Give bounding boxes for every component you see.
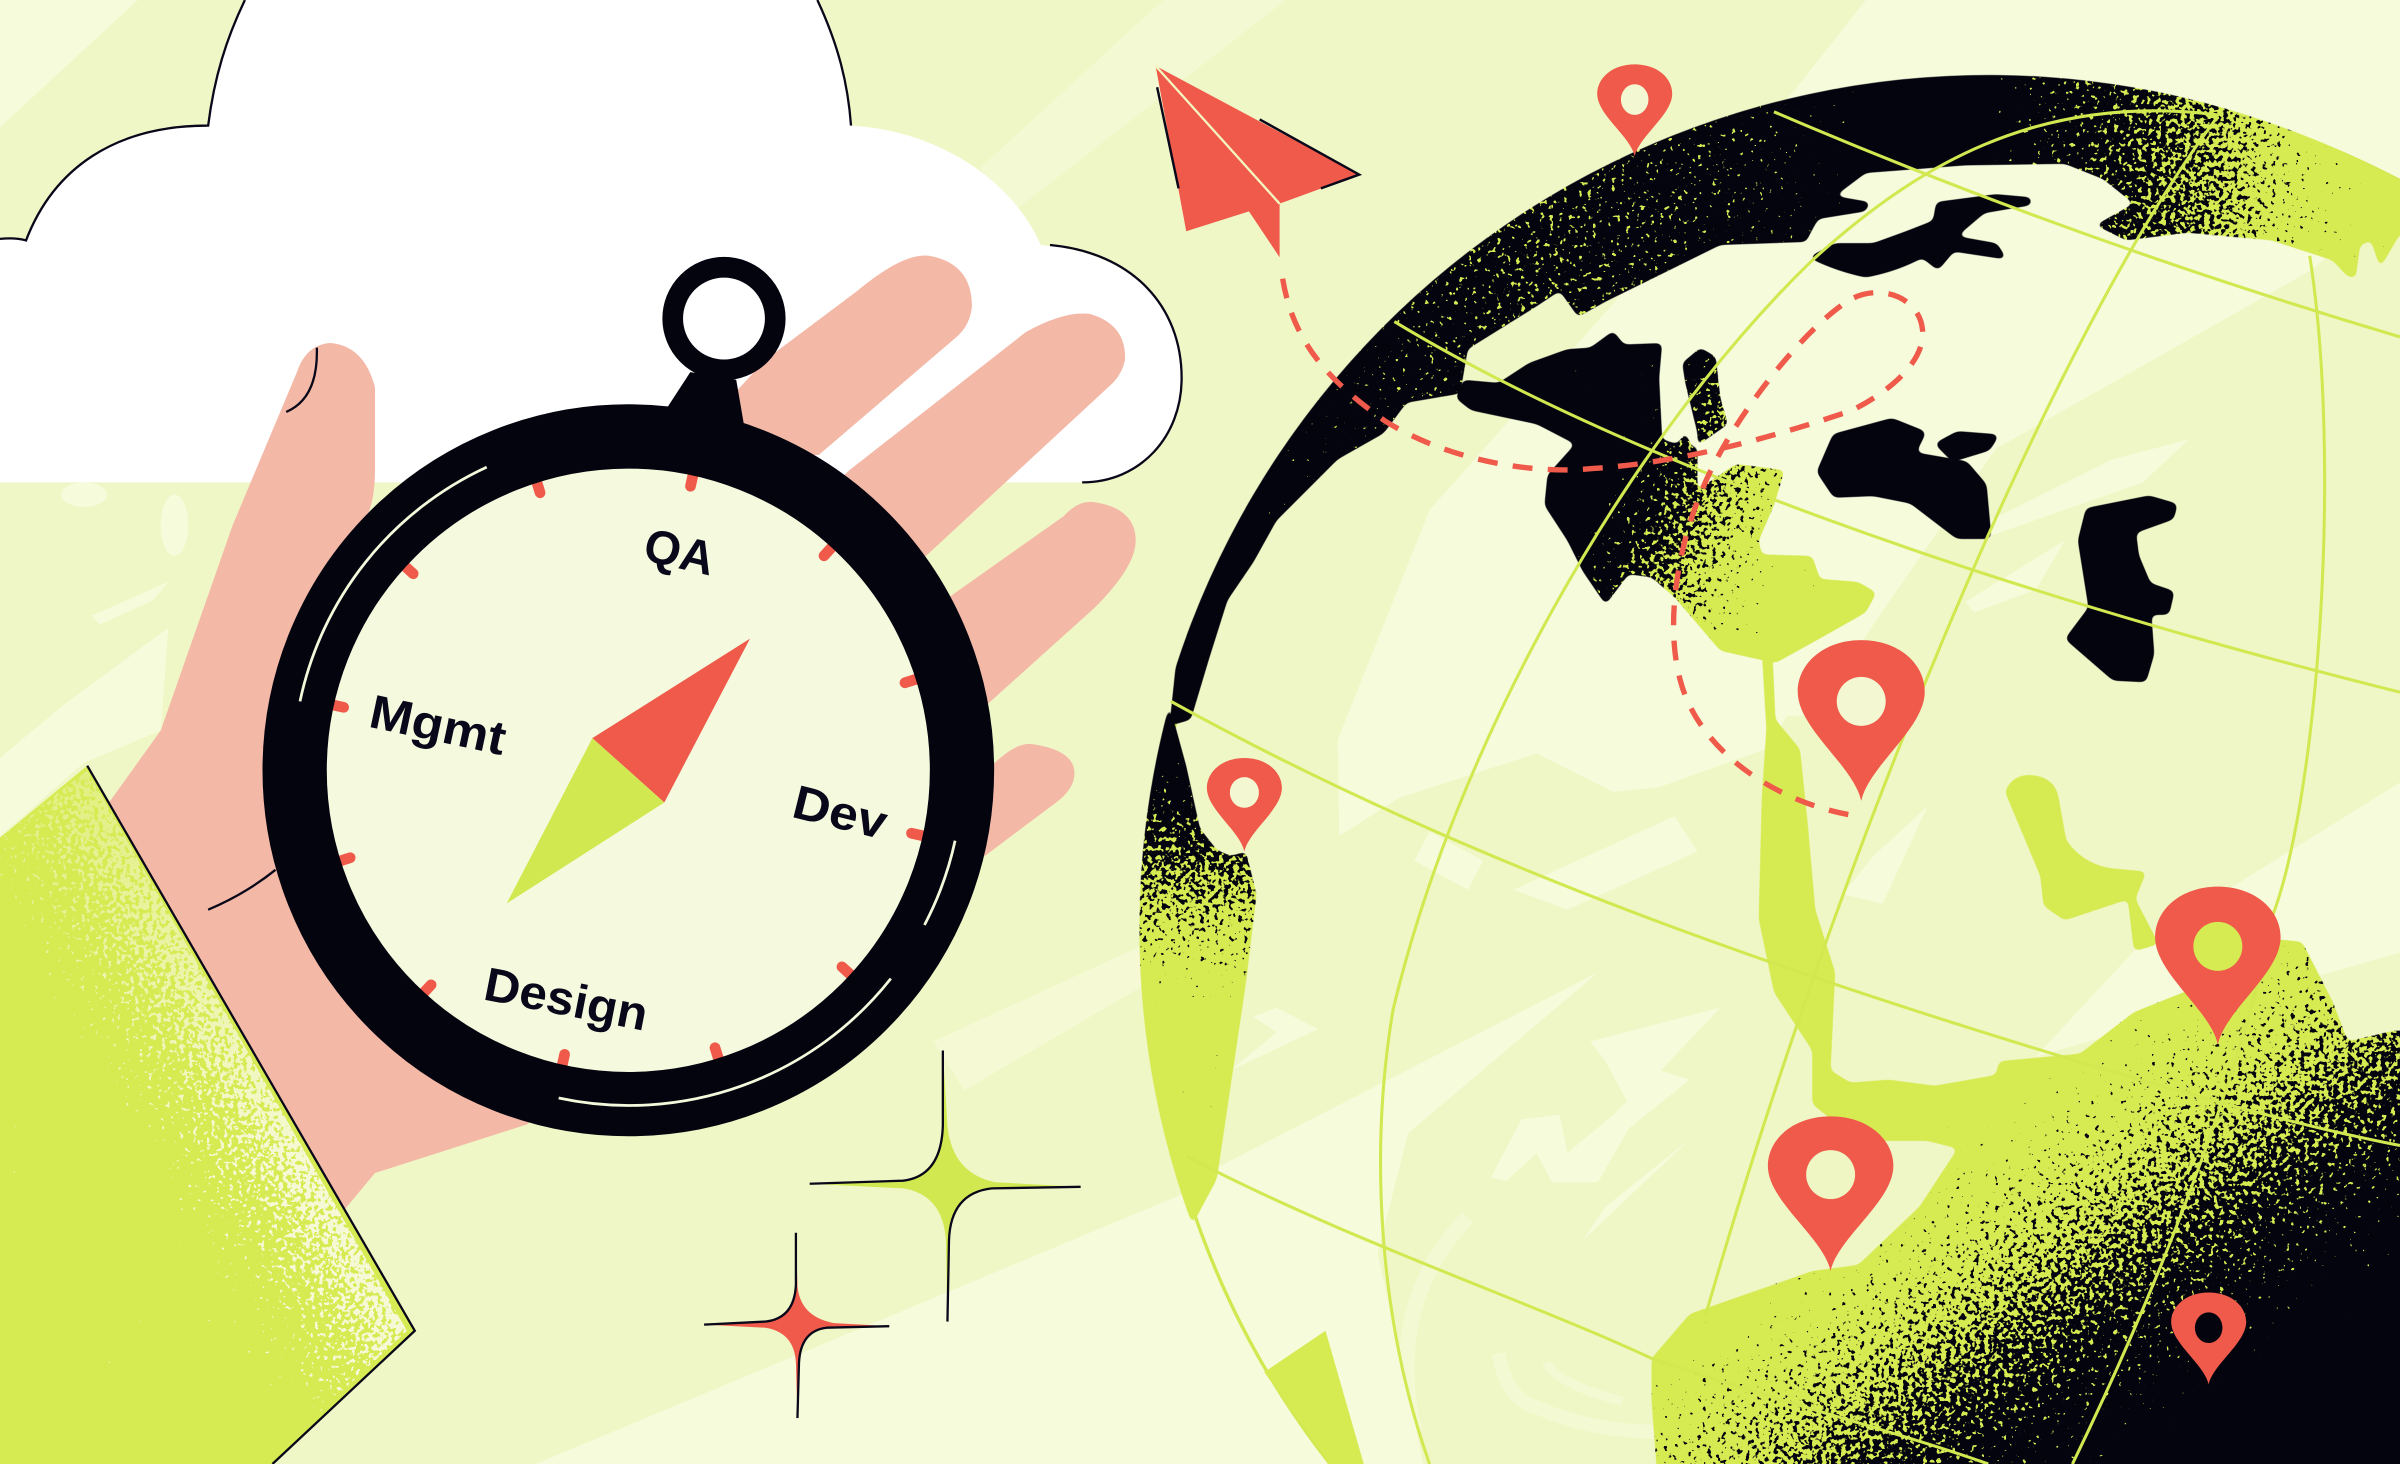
compass face [321,464,934,1077]
needle [507,639,750,904]
sparkle: lime [810,1051,1081,1322]
pin: top [1597,64,1672,156]
island B [1938,433,1996,459]
sparkle: red [704,1233,889,1418]
globe [1139,74,2400,1464]
sleeve [0,766,415,1464]
land: northern peninsula [1812,196,2030,276]
tick marks [321,464,934,1077]
paper plane [1156,66,1359,257]
pin: lower [1768,1116,1893,1271]
island C [2068,498,2175,680]
palm and thumb [77,343,765,1210]
land: central continent [1456,332,1875,663]
globe outline [1148,82,2400,1464]
label: Dev: Dev [788,776,893,850]
compass ring [295,436,962,1104]
land: southern wedge [1264,1331,1364,1464]
label: QA: QA [639,519,720,586]
land: isthmus and southern continent [1651,660,2400,1464]
land: western coast [1139,712,1256,1220]
compass stem [667,372,744,424]
cloud [0,0,1182,482]
land: northern band [1170,74,2400,724]
island A [1820,421,1988,536]
pin: centre [1798,640,1925,801]
compass loop [673,267,775,370]
thumb nail line [286,348,317,412]
label: Mgmt: Mgmt [365,685,511,766]
dashed flight path [1283,279,1923,816]
land: eastern inlet [2007,776,2157,949]
globe grid lines [1171,111,2400,1464]
pin: dark land [2171,1292,2246,1384]
fingers [673,256,1136,858]
hand [77,256,1136,1210]
pin: left [1207,758,1282,851]
ring highlights [300,467,955,1105]
pin: right [2155,887,2281,1044]
wrist line [208,870,276,910]
label: Design: Design [480,958,652,1042]
compass [295,267,962,1105]
